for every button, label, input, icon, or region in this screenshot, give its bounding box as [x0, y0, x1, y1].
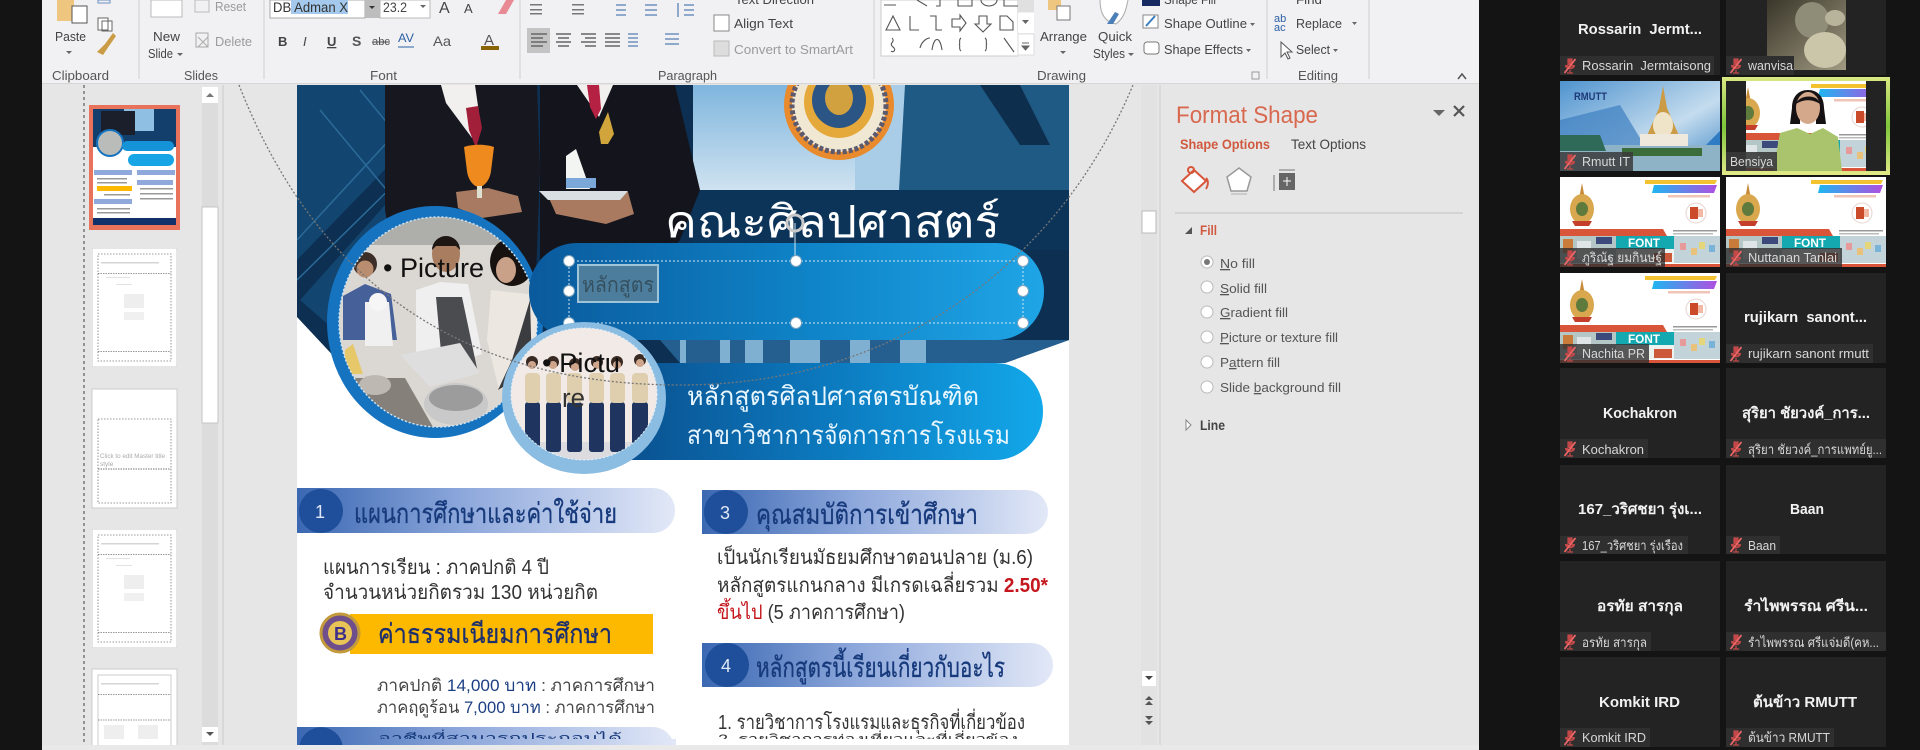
section 3 header: 3 [720, 503, 730, 523]
tile: Rmutt IT [1560, 81, 1720, 171]
group: paragraph: Convert to SmartArt [734, 42, 853, 57]
thumbnail 4 [92, 529, 177, 648]
group: drawing, shapes gallery [881, 0, 1259, 83]
tabs: Text Options [1291, 136, 1366, 152]
group: clipboard [52, 0, 116, 83]
large circle photo: kitchen class [327, 206, 543, 438]
tile: Baan [1726, 465, 1886, 554]
selected thumbnail: poster [89, 105, 180, 230]
group: editing: Select [1296, 42, 1330, 57]
dashed guide arc [239, 85, 1133, 385]
group: paragraph: Paragraph [658, 68, 717, 83]
upper pill: selected placeholder [529, 215, 1044, 340]
icon: pentagon effects [1227, 168, 1251, 194]
section 3 admission text: ขึ้นไป (5 ภาคการศึกษา) [717, 598, 905, 624]
option: gradient fill: Gradient fill [1220, 305, 1288, 320]
tile: รำไพพรรณ [1726, 561, 1886, 651]
section 2 header, cut off at the window edge [297, 727, 676, 745]
hero background: buildings [297, 85, 1069, 363]
group: font: A [484, 32, 494, 49]
ribbon [42, 0, 1479, 84]
tile: Rmutt IT: Rmutt IT [1582, 154, 1630, 169]
slide thumbnail pane [84, 85, 180, 750]
tile: Rossarin [1560, 0, 1720, 75]
tile: 167_วริศชยา [1560, 465, 1720, 554]
option: picture or texture fill: Picture or texture fill [1220, 330, 1338, 345]
section 3 admission text [717, 544, 1048, 624]
group: font: abc [372, 36, 390, 48]
section 1 header [297, 488, 675, 533]
tile: Nachita [1560, 273, 1720, 363]
group: slides: Slides [184, 68, 218, 83]
tile: Nuttanan: FONT [1794, 236, 1827, 250]
group: editing: ab [1274, 13, 1286, 25]
tile: ภูริณัฐ: ภูริณัฐ ยมกินษฐ์ [1582, 250, 1662, 266]
tile: Bensiya, active speaker [1722, 77, 1890, 175]
group: font: AV [398, 31, 414, 45]
group: slides: Delete [215, 34, 252, 49]
option: no fill [1201, 256, 1255, 271]
option: slide background fill: Slide background fill [1220, 380, 1341, 395]
section: Fill: Fill [1200, 223, 1217, 238]
editor vertical scrollbar [1141, 85, 1160, 745]
tile: Nachita: FONT [1628, 332, 1661, 346]
heading: faculty name: คณะศิลปศาสตร์ [665, 198, 1000, 247]
lower pill: programme name [600, 363, 1043, 460]
bottom status strip [42, 745, 1479, 750]
thumbnail scrollbar [202, 85, 223, 745]
section 1 header: 1 [315, 502, 325, 522]
tile: ต้นข้าว: ต้นข้าว RMUTT [1753, 694, 1857, 711]
tile: Komkit IRD: Komkit IRD [1599, 694, 1680, 711]
group: drawing, shapes gallery: Shape Effects [1164, 42, 1243, 57]
group: font: Font [370, 68, 397, 83]
group: font: U [327, 34, 336, 49]
tile: อรทัย: อรทัย สารกุล [1582, 635, 1647, 651]
group: font: S [352, 33, 361, 49]
section: Line [1186, 418, 1225, 433]
section: Line: Line [1200, 418, 1225, 433]
tile: Nuttanan: Nuttanan Tanlai [1748, 250, 1837, 265]
section 4 course list: 2. รายวิชาการท่องเที่ยวและที่เกี่ยวข้อง [718, 730, 1018, 746]
tile: Baan: Baan [1790, 501, 1824, 518]
tile: สุริยา [1726, 368, 1886, 458]
tile: rujikarn: rujikarn sanont rmutt [1748, 346, 1869, 361]
section 4 header [702, 643, 1053, 687]
tile: Bensiya, active speaker: Bensiya [1730, 154, 1774, 169]
section 4 header: หลักสูตรนี้เรียนเกี่ยวกับอะไร [756, 647, 1005, 685]
thumbnail 2 [92, 248, 177, 367]
panel title: Format Shape [1176, 102, 1318, 129]
small circle photo: student group [502, 322, 666, 474]
group: font: I [303, 34, 307, 49]
staff in suits [385, 85, 700, 272]
group: drawing, shapes gallery: Shape Outline [1164, 16, 1247, 31]
thumbnail 3: Click to edit Master title [100, 453, 165, 460]
tile: Komkit IRD [1560, 657, 1720, 747]
panel: video gallery [1560, 0, 1890, 747]
group: font: A [439, 0, 450, 17]
placeholder selection box and handles [564, 215, 1028, 328]
tile: อรทัย [1560, 561, 1720, 651]
tile: อรทัย: อรทัย สารกุล [1597, 598, 1683, 616]
tile: Rossarin: Rossarin Jermtaisong [1582, 58, 1711, 73]
tile: สุริยา: สุริยา ชัยวงค์_การแพทย์ยู... [1748, 442, 1882, 458]
tabs [1180, 136, 1366, 152]
section 1 study plan text: แผนการเรียน : ภาคปกติ 4 ปี [323, 557, 549, 579]
group: paragraph: Align Text [734, 16, 793, 31]
option: solid fill [1201, 281, 1267, 296]
icon: baht coin [321, 614, 359, 652]
icon: size and properties [1274, 170, 1295, 191]
tile: ภูริณัฐ: FONT [1628, 236, 1661, 250]
tile: Baan: Baan [1748, 538, 1776, 553]
section 3 header: คุณสมบัติการเข้าศึกษา [756, 499, 978, 532]
option: solid fill: Solid fill [1220, 281, 1267, 296]
tile: Rossarin: Rossarin Jermt... [1578, 21, 1702, 38]
group: drawing, shapes gallery: Drawing [1037, 68, 1086, 83]
icon: collapse ribbon [1458, 74, 1466, 79]
group: editing: Replace [1296, 16, 1342, 31]
tile: ต้นข้าว: ต้นข้าว RMUTT [1748, 730, 1830, 745]
window: PowerPoint work area [42, 84, 1479, 750]
section 4 course list: 1. รายวิชาการโรงแรมและธุรกิจที่เกี่ยวข้อง [718, 708, 1025, 735]
section 1 header: แผนการศึกษาและค่าใช้จ่าย [354, 497, 617, 529]
poster slide [297, 50, 1069, 746]
tuition amounts: ภาคปกติ 14,000 บาท : ภาคการศึกษา [377, 676, 655, 695]
thumbnail 3 [92, 389, 177, 508]
group: drawing, shapes gallery: Arrange [1040, 29, 1087, 44]
section 1 study plan text: จำนวนหน่วยกิตรวม 130 หน่วยกิต [323, 582, 598, 604]
tile: สุริยา: สุริยา ชัยวงค์_การ... [1742, 404, 1870, 423]
tile: รำไพพรรณ: รำไพพรรณ ศรีแจ่มดี(คห... [1748, 635, 1879, 650]
group: editing [1274, 0, 1357, 83]
tuition amounts [377, 676, 655, 718]
section 2 header, cut off at the window edge: อาชีพที่สามารถประกอบได้ [378, 729, 622, 745]
section 3 admission text: เป็นนักเรียนมัธยมศึกษาตอนปลาย (ม.6) [717, 544, 1033, 569]
group: font: B [278, 34, 287, 49]
tile: rujikarn [1726, 273, 1886, 363]
thumbnail 5, cut off at the pane edge [92, 669, 177, 745]
section 1 study plan text [324, 557, 597, 599]
icon: fill bucket [1182, 167, 1208, 192]
placeholder text: Picture: • Picture [383, 253, 484, 283]
tile: ภูริณัฐ [1560, 177, 1720, 267]
tuition banner: ค่าธรรมเนียมการศึกษา [378, 619, 612, 649]
selected text [578, 265, 658, 302]
tile: Kochakron: Kochakron [1603, 405, 1677, 422]
tile: ต้นข้าว [1726, 657, 1886, 747]
tile: Komkit IRD: Komkit IRD [1582, 730, 1646, 745]
option: no fill: No fill [1220, 256, 1255, 271]
group: slides: Slide [148, 46, 173, 61]
tile: wanvisa [1726, 0, 1886, 75]
group: editing: Editing [1298, 68, 1338, 83]
panel controls [1433, 106, 1464, 116]
group: font: A [464, 1, 473, 16]
tile: 167_วริศชยา: 167_วริศชยา รุ่งเรือง [1582, 538, 1683, 554]
tile: Nachita: Nachita PR [1582, 346, 1645, 361]
group: editing: ac [1274, 22, 1286, 34]
placeholder text: Picture wrapped [543, 352, 618, 408]
placeholder text: Picture wrapped: • Pictu [542, 348, 620, 378]
placeholder text: Picture wrapped: re [562, 383, 585, 413]
group: slides [148, 0, 252, 83]
group: clipboard: Paste [55, 29, 86, 44]
tuition amounts: ภาคฤดูร้อน 7,000 บาท : ภาคการศึกษา [377, 698, 655, 718]
tile: รำไพพรรณ: รำไพพรรณ ศรีน... [1744, 596, 1868, 615]
tile: Kochakron: Kochakron [1582, 442, 1644, 457]
group: paragraph [527, 0, 853, 83]
section 4 course list [719, 708, 1024, 739]
section 3 admission text: หลักสูตรแกนกลาง มีเกรดเฉลี่ยรวม 2.50* [717, 571, 1048, 598]
group: drawing, shapes gallery: Styles [1093, 46, 1125, 61]
panel: Format Shape [1175, 102, 1464, 433]
icon: baht coin: B [334, 624, 347, 644]
group: font [270, 0, 514, 83]
tile: Nuttanan [1726, 177, 1886, 267]
tuition banner [321, 614, 653, 654]
group: slides: New [153, 29, 181, 44]
tile: rujikarn: rujikarn sanont... [1744, 309, 1867, 326]
tile: Kochakron [1560, 368, 1720, 458]
section 3 header [702, 490, 1048, 534]
group: font: 23.2 [383, 0, 407, 15]
tile: Rmutt IT: RMUTT [1574, 91, 1607, 103]
tile: wanvisa: wanvisa [1747, 58, 1794, 73]
lower pill: programme name: สาขาวิชาการจัดการการโรงแรม [687, 420, 1010, 450]
thumbnail 3: style [100, 461, 114, 468]
university emblem [784, 85, 894, 160]
group: clipboard: Clipboard [52, 68, 109, 83]
tabs: Shape Options [1180, 136, 1270, 152]
section: Fill [1185, 223, 1217, 238]
selected text: หลักสูตร [582, 274, 654, 298]
group: drawing, shapes gallery: Quick [1098, 29, 1133, 44]
group: font: Aa [433, 33, 451, 49]
option: pattern fill: Pattern fill [1220, 355, 1280, 370]
lower pill: programme name: หลักสูตรศิลปศาสตรบัณฑิต [687, 381, 979, 412]
tile: 167_วริศชยา: 167_วริศชยา รุ่งเ... [1578, 500, 1702, 519]
section 4 header: 4 [721, 656, 731, 676]
